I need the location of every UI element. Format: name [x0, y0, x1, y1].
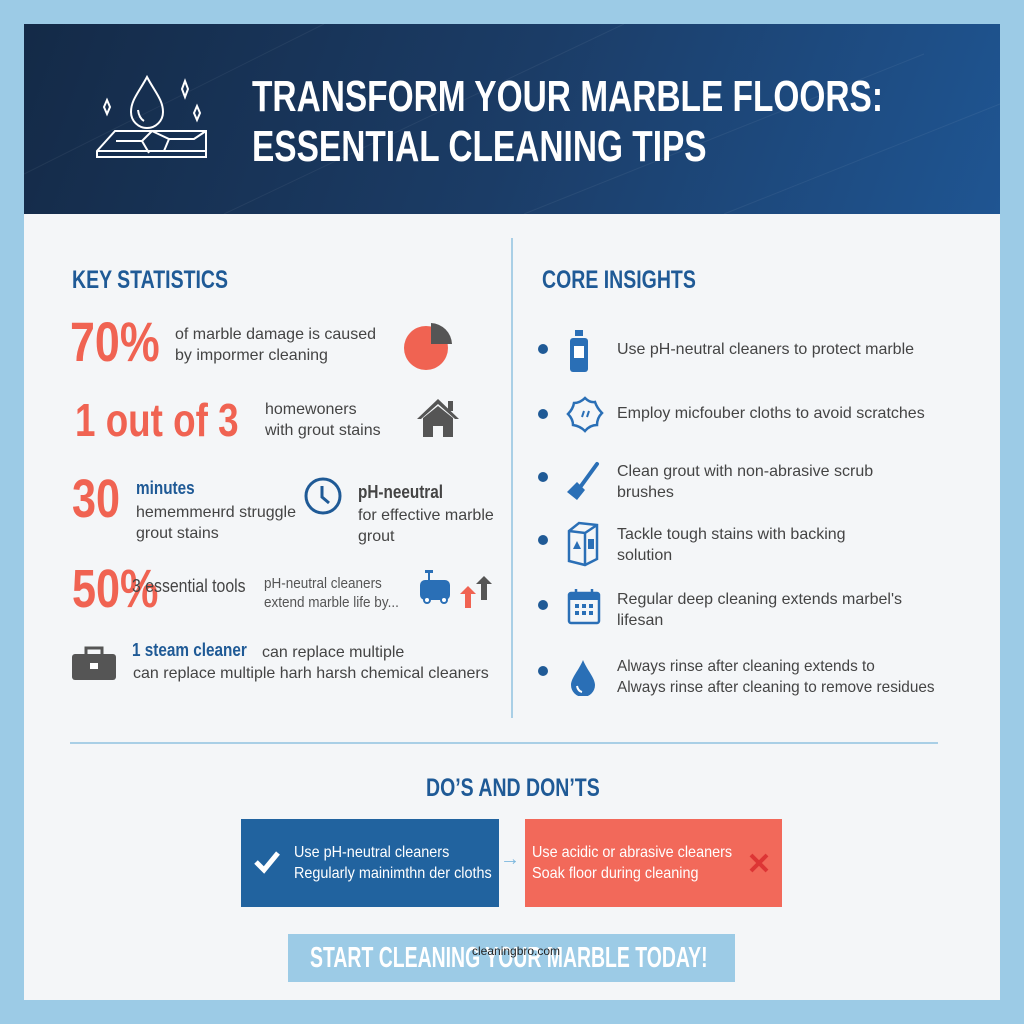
insight 4: solution	[617, 547, 672, 564]
panel: do's	[241, 819, 499, 907]
call to action: START CLEANING YOUR MARBLE TODAY!	[310, 942, 708, 974]
stat: 50%: extend marble life by...	[264, 594, 399, 611]
stat: 70%	[70, 310, 452, 373]
title: TRANSFORM YOUR MARBLE FLOORS:	[252, 72, 883, 121]
insight 3: brushes	[617, 484, 674, 501]
icon: marble drop	[96, 75, 207, 158]
heading: do's and don'ts: DO’S AND DON’TS	[426, 774, 600, 802]
insight 4: Tackle tough stains with backing	[617, 526, 846, 543]
divider horizontal	[70, 742, 938, 744]
insight 5: lifesan	[617, 612, 663, 629]
panel: don'ts: Soak floor during cleaning	[532, 865, 699, 882]
divider vertical	[511, 238, 513, 718]
stat: steam cleaner: 1 steam cleaner	[132, 640, 247, 660]
stat: 70%: 70%	[70, 310, 160, 373]
list: core insights	[538, 330, 935, 696]
icon: clock	[304, 478, 342, 514]
panel: do's: Regularly mainimthn der cloths	[294, 865, 492, 882]
stat: steam cleaner: can replace multiple harh harsh chemical cleaners	[133, 665, 489, 682]
icon: cross	[750, 854, 768, 872]
stat: 30 minutes	[72, 469, 494, 545]
stat: 1 out of 3: with grout stains	[265, 422, 381, 439]
insight 2: Employ micfouber cloths to avoid scratches	[617, 405, 925, 422]
stat: 70%: of marble damage is caused	[175, 326, 376, 343]
panel: do's: Use pH-neutral cleaners	[294, 844, 449, 861]
stat: 30 minutes: pH-neeutral	[358, 482, 443, 502]
insight 6	[538, 658, 935, 696]
insight 5	[538, 589, 902, 629]
stat: steam cleaner	[72, 640, 489, 682]
heading: core insights: CORE INSIGHTS	[542, 266, 696, 294]
icon: house	[417, 399, 459, 437]
stat: 1 out of 3: homewoners	[265, 401, 357, 418]
panel: don'ts: Use acidic or abrasive cleaners	[532, 844, 732, 861]
stat: 1 out of 3	[75, 394, 459, 446]
stat: 50%	[72, 559, 492, 619]
icon: toolbox	[72, 646, 116, 680]
insight 3	[538, 462, 873, 501]
stat: 50%: pH-neutral cleaners	[264, 575, 382, 592]
stat: 30 minutes: 30	[72, 469, 120, 529]
icon: check	[254, 851, 280, 874]
panel: don'ts	[525, 819, 782, 907]
call to action	[288, 934, 735, 982]
title: ESSENTIAL CLEANING TIPS	[252, 122, 707, 171]
stat: 50%: 3 essential tools	[132, 576, 246, 596]
insight 4	[538, 522, 846, 566]
insight 6: Always rinse after cleaning to remove residues	[617, 679, 935, 696]
icon: pie chart	[404, 323, 452, 370]
stat: 50%: 50%	[72, 559, 158, 619]
heading: key statistics: KEY STATISTICS	[72, 266, 228, 294]
insight 2	[538, 396, 925, 433]
insight 5: Regular deep cleaning extends marbel's	[617, 591, 902, 608]
insight 1: Use pH-neutral cleaners to protect marble	[617, 341, 914, 358]
insight 3: Clean grout with non-abrasive scrub	[617, 463, 873, 480]
stat: 30 minutes: hememmeнrd struggle	[136, 504, 296, 521]
stat: 70%: by impormer cleaning	[175, 347, 328, 364]
stat: 30 minutes: grout stains	[136, 525, 219, 542]
watermark: cleaningbro.com	[472, 944, 560, 958]
stat: 30 minutes: minutes	[136, 478, 195, 498]
arrow: →	[500, 848, 520, 870]
stat: steam cleaner: can replace multiple	[262, 644, 404, 661]
header banner	[24, 24, 1000, 214]
title	[252, 72, 883, 171]
stat: 30 minutes: grout	[358, 528, 394, 545]
insight 6: Always rinse after cleaning extends to	[617, 658, 875, 675]
icon: van and arrows	[420, 570, 492, 608]
stat: 30 minutes: for effective marble	[358, 507, 494, 524]
stat: 1 out of 3: 1 out of 3	[75, 394, 239, 446]
insight 1	[538, 330, 914, 372]
